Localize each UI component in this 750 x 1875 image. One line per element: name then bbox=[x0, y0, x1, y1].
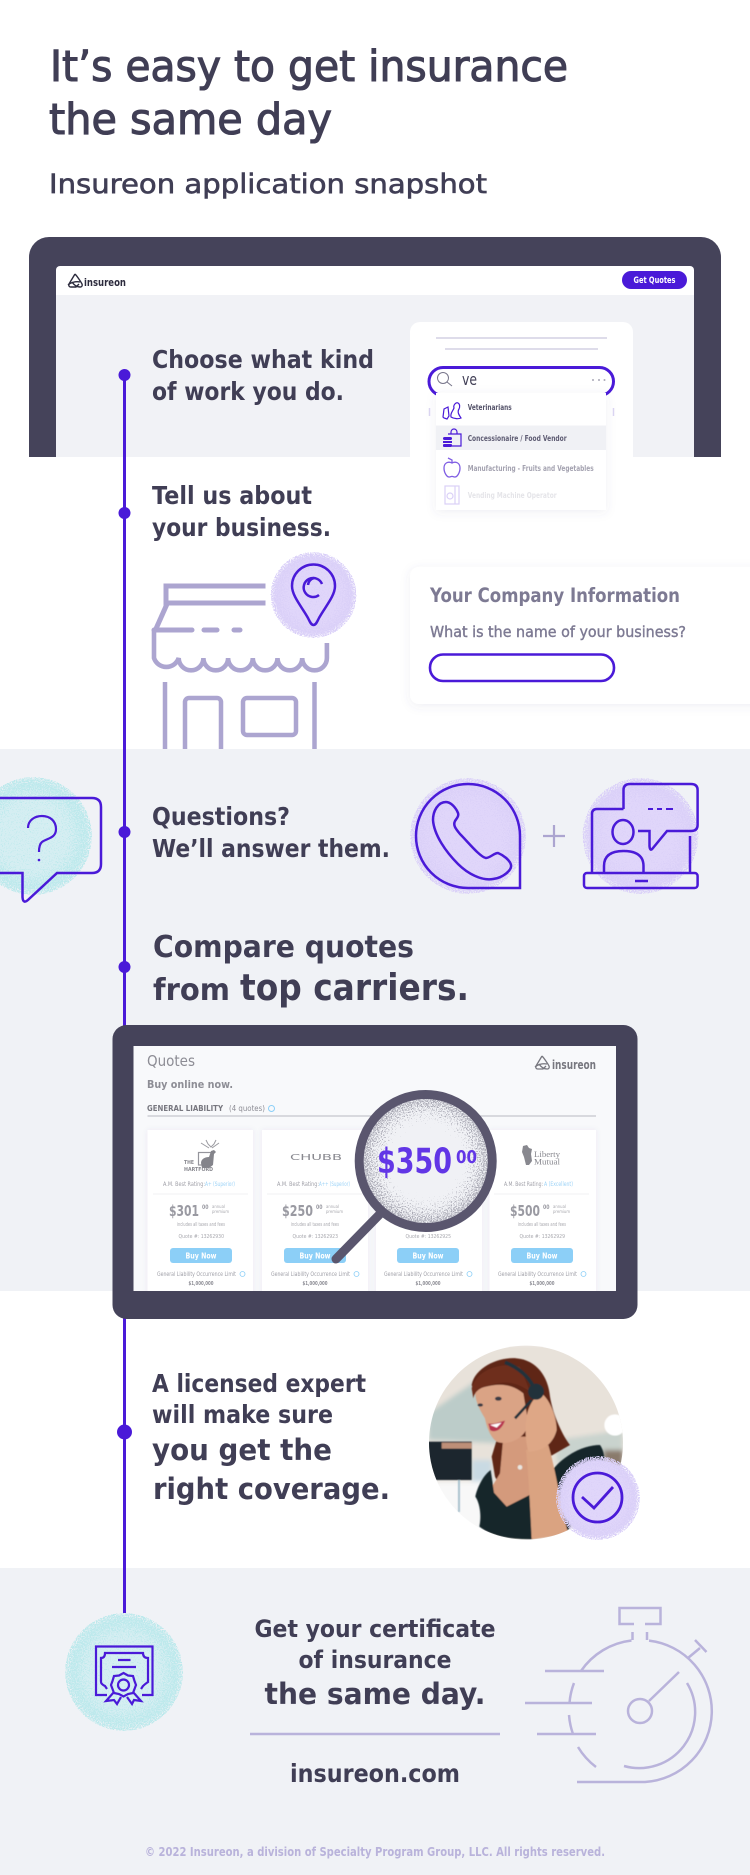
plus sign bbox=[543, 825, 565, 847]
quote card: the hartford: Quote #: 13262930 bbox=[178, 1234, 224, 1240]
copyright: © 2022 Insureon, a division of Specialty Program Group, LLC. All rights reserved. bbox=[145, 1844, 605, 1859]
row: concessionaire: Concessionaire / Food Vendor bbox=[468, 434, 567, 443]
quote card: the hartford: A.M. Best Rating: bbox=[163, 1181, 205, 1188]
icon: question speech bubble bbox=[0, 777, 101, 902]
photo: licensed expert with headset bbox=[427, 1343, 627, 1543]
magnifying glass with $350 price bbox=[336, 1094, 492, 1259]
quote card: the hartford: includes all taxes and fees bbox=[177, 1222, 225, 1228]
step text: tell us bbox=[152, 481, 331, 542]
heading: compare quotes: top carriers. bbox=[240, 966, 469, 1009]
panel: quotes tablet bbox=[112, 1025, 638, 1319]
name input bbox=[430, 654, 614, 681]
step text: choose work: of work you do. bbox=[152, 377, 344, 406]
grey band: certificate footer bbox=[0, 1568, 750, 1875]
closing text: certificate: of insurance bbox=[298, 1646, 452, 1674]
quote card: chubb: 00 bbox=[316, 1204, 322, 1211]
heading: compare quotes: from bbox=[153, 973, 230, 1008]
quote card: liberty mutual: Buy Now bbox=[526, 1252, 558, 1260]
quote card: chubb: A++ (Superior) bbox=[319, 1181, 350, 1188]
panel: your company information card bbox=[410, 567, 750, 704]
get quotes button: Get Quotes bbox=[634, 276, 676, 286]
laptop frame bbox=[29, 237, 721, 457]
step text: licensed expert: will make sure bbox=[152, 1400, 333, 1429]
quote card: liberty mutual: annual bbox=[553, 1204, 566, 1210]
icon: storefront with location pin bbox=[154, 552, 356, 752]
quote card: the hartford bbox=[153, 1140, 248, 1286]
quote card: liberty mutual: 00 bbox=[543, 1204, 550, 1211]
location pin bbox=[292, 564, 335, 625]
hartford logo: THE bbox=[184, 1160, 194, 1166]
icon: check badge bbox=[556, 1456, 640, 1540]
row: veterinarians bbox=[443, 403, 512, 419]
quote card: liberty mutual: includes all taxes and fees bbox=[518, 1222, 566, 1228]
app header bar bbox=[56, 266, 694, 295]
quote card: chubb: includes all taxes and fees bbox=[291, 1222, 339, 1228]
tablet frame bbox=[112, 1025, 638, 1319]
hartford logo bbox=[184, 1140, 219, 1173]
title bbox=[49, 43, 568, 145]
insureon logo bbox=[68, 274, 126, 289]
step text: licensed expert: you get the bbox=[152, 1433, 332, 1467]
quote card: chubb: $1,000,000 bbox=[302, 1281, 328, 1287]
website url: insureon.com bbox=[290, 1759, 460, 1788]
section label bbox=[147, 1105, 275, 1112]
heading: compare quotes: Compare quotes bbox=[153, 930, 414, 965]
quote card: third carrier bbox=[384, 1234, 472, 1286]
placeholder lines bbox=[436, 338, 607, 349]
quote card: third carrier: Buy Now bbox=[412, 1252, 444, 1260]
card heading: Your Company Information bbox=[429, 584, 680, 607]
quote card: liberty mutual: premium bbox=[553, 1209, 570, 1215]
quote card: liberty mutual: General Liability Occurrence Limit bbox=[498, 1272, 578, 1278]
quote card: chubb: General Liability Occurrence Limit bbox=[271, 1272, 351, 1278]
magnifying glass with $350 price: $350 bbox=[377, 1142, 452, 1182]
quote card: liberty mutual: Liberty bbox=[534, 1150, 560, 1159]
row: concessionaire bbox=[443, 429, 567, 447]
section label: GENERAL LIABILITY bbox=[147, 1104, 223, 1113]
quote card: liberty mutual: A.M. Best Rating: bbox=[504, 1181, 543, 1188]
step text: questions: We’ll answer them. bbox=[152, 834, 390, 863]
insureon logo: insureon bbox=[84, 276, 126, 289]
timeline bbox=[117, 369, 132, 1613]
card question: What is the name of your business? bbox=[430, 623, 686, 641]
panel: laptop application screen bbox=[29, 237, 721, 457]
divider rule bbox=[250, 1733, 500, 1735]
icon: laptop video chat bbox=[582, 778, 698, 894]
row: manufacturing bbox=[444, 458, 594, 477]
step text: licensed expert bbox=[152, 1369, 390, 1506]
tablet screen bbox=[134, 1046, 616, 1291]
icon: stopwatch bbox=[525, 1608, 712, 1782]
closing text: certificate: the same day. bbox=[264, 1677, 486, 1711]
quote card: chubb: Buy Now bbox=[300, 1252, 331, 1260]
quote card: the hartford: $1,000,000 bbox=[188, 1281, 214, 1287]
closing text: certificate bbox=[254, 1615, 496, 1711]
side ticks bbox=[430, 408, 614, 416]
step text: licensed expert: right coverage. bbox=[153, 1472, 390, 1506]
quotes heading: Quotes bbox=[147, 1052, 195, 1070]
subtitle: Insureon application snapshot bbox=[49, 169, 487, 200]
title: It’s easy to get insurance bbox=[50, 43, 568, 92]
row: manufacturing: Manufacturing - Fruits and Vegetables bbox=[468, 464, 594, 473]
insureon logo small: insureon bbox=[552, 1058, 596, 1072]
title: the same day bbox=[49, 96, 332, 145]
step text: questions bbox=[152, 802, 390, 863]
quote card: liberty mutual: A (Excellent) bbox=[544, 1181, 573, 1188]
quote card: the hartford: General Liability Occurrence Limit bbox=[157, 1272, 237, 1278]
highlighted row bbox=[436, 426, 606, 450]
step text: licensed expert: A licensed expert bbox=[152, 1369, 366, 1398]
heading: compare quotes bbox=[153, 930, 469, 1009]
closing text: certificate: Get your certificate bbox=[254, 1615, 496, 1643]
get quotes button bbox=[622, 271, 687, 289]
quote card: chubb: premium bbox=[326, 1209, 343, 1215]
quote card: liberty mutual: Quote #: 13262929 bbox=[520, 1234, 565, 1240]
quote card: the hartford: A+ (Superior) bbox=[205, 1181, 235, 1188]
quote card: the hartford: Buy Now bbox=[186, 1252, 217, 1260]
magnifying glass with $350 price: 00 bbox=[456, 1147, 477, 1168]
quote card: liberty mutual: $1,000,000 bbox=[530, 1281, 555, 1287]
quote card: chubb: $250 bbox=[282, 1202, 313, 1220]
step text: tell us: Tell us about bbox=[152, 481, 312, 510]
quote card: the hartford: premium bbox=[212, 1209, 229, 1215]
white card bbox=[410, 322, 633, 457]
quote card: chubb: annual bbox=[326, 1204, 339, 1210]
panel: work type search card bbox=[410, 322, 633, 510]
quote card: liberty mutual bbox=[494, 1145, 589, 1286]
search field: ve bbox=[462, 370, 477, 389]
quote card: the hartford: $301 bbox=[169, 1202, 199, 1220]
location pin circle bbox=[270, 552, 356, 638]
step text: choose work bbox=[152, 345, 374, 406]
step text: choose work: Choose what kind bbox=[152, 345, 374, 374]
section label: (4 quotes) bbox=[229, 1104, 265, 1113]
quote card: chubb: Quote #: 13262923 bbox=[292, 1234, 338, 1240]
app grey body bbox=[56, 295, 694, 457]
quote card: third carrier: General Liability Occurrence Limit bbox=[384, 1272, 464, 1278]
icon: certificate bbox=[65, 1613, 183, 1731]
step text: questions: Questions? bbox=[152, 802, 290, 831]
grey band: questions and quotes bbox=[0, 749, 750, 1291]
quote card: chubb bbox=[267, 1154, 362, 1286]
insureon logo small bbox=[535, 1056, 596, 1072]
quote card: liberty mutual: Mutual bbox=[534, 1158, 561, 1166]
search field bbox=[429, 368, 614, 396]
step dots bbox=[117, 369, 132, 1440]
quote card: chubb: CHUBB bbox=[290, 1153, 342, 1162]
quote card: the hartford: annual bbox=[212, 1204, 225, 1210]
dropdown results bbox=[436, 393, 606, 510]
step text: tell us: your business. bbox=[152, 513, 331, 542]
row: vending machine: Vending Machine Operator bbox=[468, 491, 557, 500]
row: vending machine bbox=[445, 486, 557, 504]
buy online text: Buy online now. bbox=[147, 1079, 233, 1091]
quote card: third carrier: Quote #: 13262925 bbox=[406, 1234, 451, 1240]
quote card: third carrier: $1,000,000 bbox=[416, 1281, 441, 1287]
row: veterinarians: Veterinarians bbox=[468, 403, 512, 412]
icon: phone bbox=[410, 778, 526, 894]
quote card: liberty mutual: $500 bbox=[510, 1202, 540, 1220]
hartford logo: HARTFORD bbox=[184, 1167, 213, 1173]
quote card: chubb: A.M. Best Rating: bbox=[277, 1181, 319, 1188]
quote card: the hartford: 00 bbox=[202, 1204, 208, 1211]
